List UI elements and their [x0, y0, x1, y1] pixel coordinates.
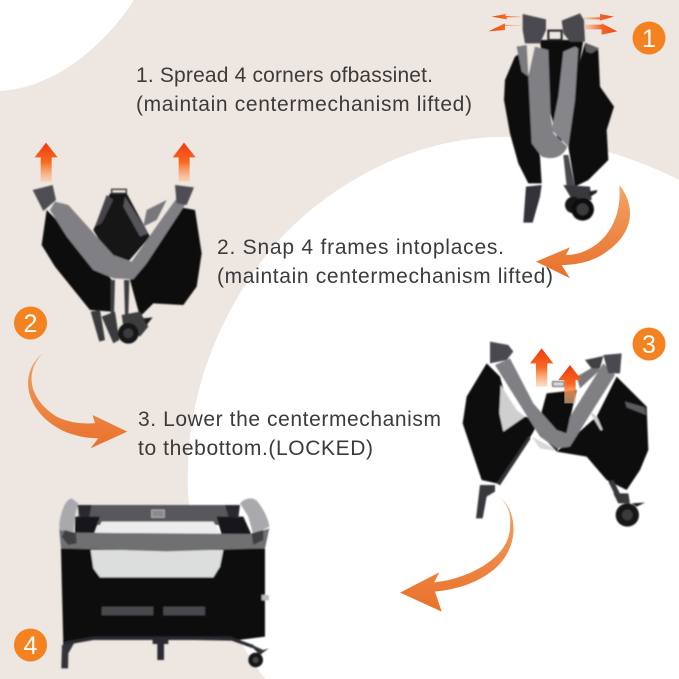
arrows: spread corners outward: [488, 14, 617, 35]
step 1 instruction text: (maintain centermechanism lifted): [136, 93, 472, 116]
badge 3: 3: [642, 331, 656, 359]
badge 4: 4: [24, 632, 38, 660]
arrows: lift corners up: [35, 143, 196, 182]
step 3 instruction text: to thebottom.(LOCKED): [138, 437, 373, 460]
step 3 nearly-open bassinet photo: [463, 342, 648, 527]
curved arrow from step 1 to step 2: [536, 185, 630, 278]
badge 1: [632, 22, 666, 54]
badge 4: [14, 628, 47, 662]
step 1 instruction text: [136, 64, 472, 116]
curved arrow from step 3 to step 4: [400, 497, 514, 612]
step 2 instruction text: 2. Snap 4 frames intoplaces.: [217, 236, 504, 259]
white central shape: [188, 137, 679, 679]
step 1 instruction text: 1. Spread 4 corners ofbassinet.: [136, 64, 433, 87]
step 4 fully open bassinet photo: [59, 498, 269, 668]
white corner shape: [0, 0, 134, 91]
step 2 instruction text: (maintain centermechanism lifted): [217, 265, 553, 288]
step 3 instruction text: 3. Lower the centermechanism: [138, 408, 441, 431]
arrows: lift center mechanism up: [530, 348, 582, 403]
badge 3: [632, 328, 666, 360]
step 2 half-open bassinet photo: [33, 185, 202, 344]
badge 1: 1: [642, 25, 656, 53]
step 3 instruction text: [138, 408, 441, 460]
badge 2: [14, 306, 47, 340]
badge 2: 2: [24, 310, 37, 338]
curved arrow from step 2 to step 3: [28, 353, 127, 448]
step 2 instruction text: [217, 236, 553, 288]
step 1 folded bassinet photo: [504, 13, 614, 223]
